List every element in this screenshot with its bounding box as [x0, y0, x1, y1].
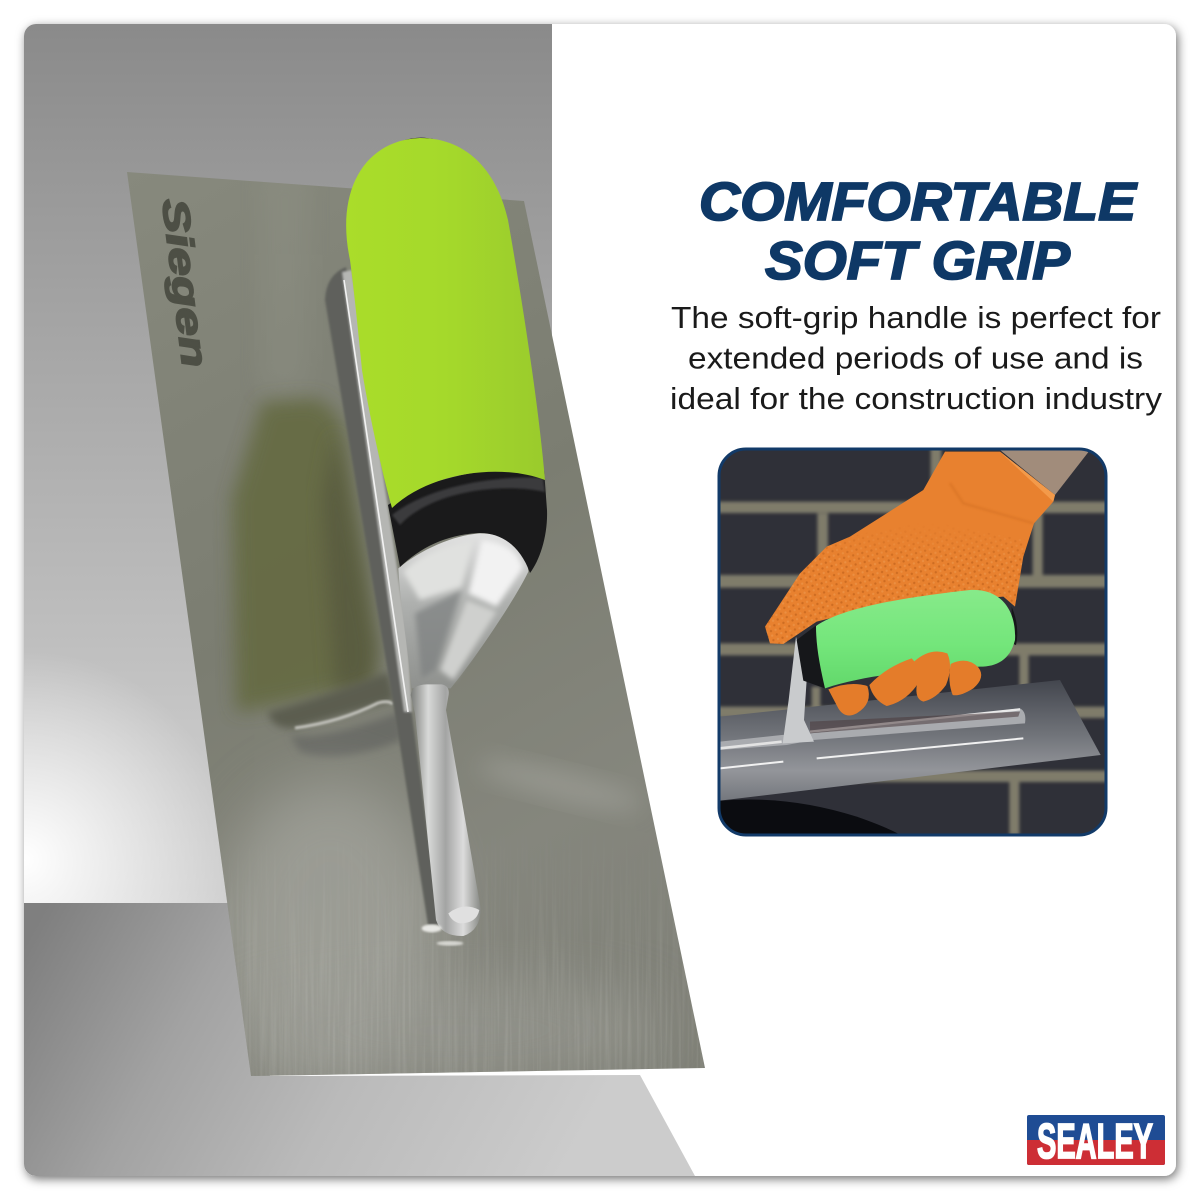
fingers — [828, 652, 981, 715]
trowel blade — [127, 170, 720, 1090]
soft grip handle — [346, 138, 547, 573]
heading: SOFT GRIP — [765, 231, 1071, 291]
trowel blade — [710, 680, 1101, 840]
description text: ideal for the construction industry — [670, 382, 1163, 416]
inset frame — [719, 449, 1106, 835]
end cap — [404, 138, 433, 140]
description text — [670, 301, 1163, 416]
glove — [765, 452, 1055, 644]
green handle — [816, 590, 1015, 688]
handle tang — [325, 267, 440, 925]
black collar — [388, 469, 547, 573]
description text: extended periods of use and is — [688, 342, 1143, 376]
description text: The soft-grip handle is perfect for — [671, 301, 1161, 335]
black collar — [797, 625, 825, 688]
green grip — [346, 138, 545, 508]
handle neck and rod — [398, 533, 528, 946]
forearm — [1000, 450, 1090, 495]
studio backdrop — [24, 24, 695, 1176]
heading: COMFORTABLE — [699, 172, 1138, 232]
inset photo: gloved hand gripping handle — [710, 440, 1115, 845]
heading — [699, 172, 1138, 291]
brick wall — [720, 450, 1104, 834]
panel: product photo — [24, 24, 720, 1176]
brand mark: Siegen — [154, 196, 215, 370]
metal stem — [783, 637, 814, 743]
